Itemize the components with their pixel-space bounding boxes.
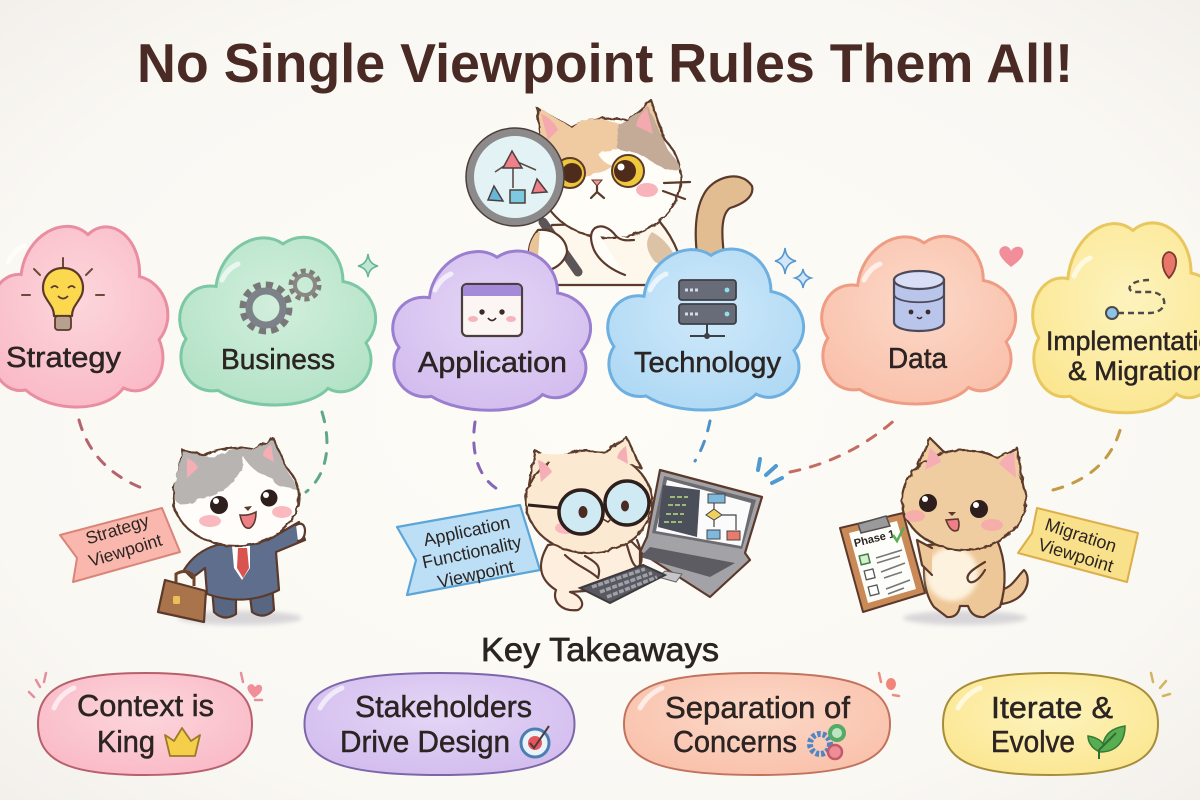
illustration: calico cat with magnifying glass — [466, 100, 752, 285]
banner: Migration Viewpoint: Migration — [1043, 514, 1119, 556]
icon: briefcase — [158, 571, 206, 622]
cloud: Strategy — [0, 226, 168, 407]
icon: light bulb — [22, 258, 104, 330]
pill: Separation of Concerns — [624, 673, 899, 775]
cat face — [210, 496, 228, 514]
cat hand on handle — [529, 230, 567, 271]
cat body — [536, 222, 684, 285]
cat head — [173, 438, 299, 546]
heading: Key Takeaways: Key Takeaways — [481, 631, 719, 668]
banner: Application Functionality Viewpoint: Functionality — [420, 532, 523, 572]
cat head — [902, 438, 1026, 550]
pill: Iterate & Evolve — [943, 673, 1170, 775]
banner: Migration Viewpoint: Viewpoint — [1036, 534, 1116, 576]
pill: Iterate & Evolve: Evolve — [991, 724, 1075, 759]
icon: leaf — [1088, 726, 1125, 759]
cloud: Application — [393, 251, 591, 410]
label: Application: Application — [418, 347, 567, 379]
pill: Stakeholders Drive Design: Stakeholders — [355, 689, 532, 724]
magnifying glass — [466, 128, 578, 272]
pill: Separation of Concerns: Separation of — [665, 690, 850, 725]
pill: Context is King: Context is — [77, 688, 214, 723]
banner: Application Functionality Viewpoint: Application — [422, 512, 512, 550]
label: Strategy: Strategy — [6, 342, 122, 374]
decorative sparkles and heart — [358, 246, 1023, 288]
cat raised paw — [591, 226, 634, 275]
cat suit — [184, 522, 305, 600]
cloud: Implementation & Migration — [1033, 223, 1200, 413]
icon: app window — [462, 284, 522, 336]
icon: clipboard — [840, 513, 925, 612]
cat body — [541, 535, 640, 610]
cat body — [924, 540, 1005, 617]
illustration: business cat with banner — [60, 438, 305, 625]
pill: Separation of Concerns: Concerns — [673, 724, 797, 759]
icon: crown — [165, 728, 200, 756]
pill: Context is King — [29, 673, 262, 775]
icon: coloured gears — [810, 726, 844, 759]
connector dashed lines — [79, 412, 1122, 492]
banner: Strategy Viewpoint: Strategy — [83, 510, 152, 548]
keyboard — [580, 565, 665, 603]
illustration: glasses cat with laptop — [397, 438, 782, 610]
banner: Application Functionality Viewpoint: Viewpoint — [436, 556, 516, 592]
cat legs — [212, 584, 274, 618]
cat tail — [696, 176, 752, 255]
banner: Migration Viewpoint — [1018, 508, 1138, 582]
banner: Application Functionality Viewpoint — [397, 505, 540, 595]
icon: route and pin — [1106, 252, 1176, 319]
pill: Stakeholders Drive Design — [304, 673, 574, 775]
icon: gears — [243, 271, 319, 331]
title: No Single Viewpoint Rules Them All! — [137, 32, 1073, 94]
cat head — [526, 438, 652, 553]
cloud: Technology — [608, 249, 804, 410]
cat tail — [1000, 570, 1028, 604]
label: Implementation & Migration — [1046, 326, 1200, 386]
pill: Stakeholders Drive Design: Drive Design — [340, 724, 510, 759]
cat glasses — [528, 481, 649, 534]
pill: Iterate & Evolve: Iterate & — [991, 690, 1113, 725]
icon: database — [894, 271, 944, 331]
label: Data: Data — [888, 343, 948, 375]
banner: Strategy Viewpoint — [60, 508, 180, 582]
cat eyes — [555, 158, 585, 188]
cat head — [537, 100, 681, 238]
label: Technology: Technology — [634, 347, 781, 379]
cat face — [919, 494, 937, 512]
pill: Context is King: King — [97, 724, 155, 759]
icon: server — [679, 280, 736, 339]
cloud: Business — [180, 237, 376, 405]
banner: Strategy Viewpoint: Viewpoint — [86, 530, 164, 571]
motion marks — [758, 459, 782, 483]
illustration: orange cat with clipboard — [840, 438, 1138, 625]
cat arm — [967, 562, 985, 582]
laptop — [640, 470, 762, 597]
label: Business: Business — [221, 344, 335, 376]
cloud: Data — [822, 236, 1016, 404]
icon: clipboard: Phase 1 — [853, 528, 896, 550]
icon: target — [521, 726, 549, 757]
